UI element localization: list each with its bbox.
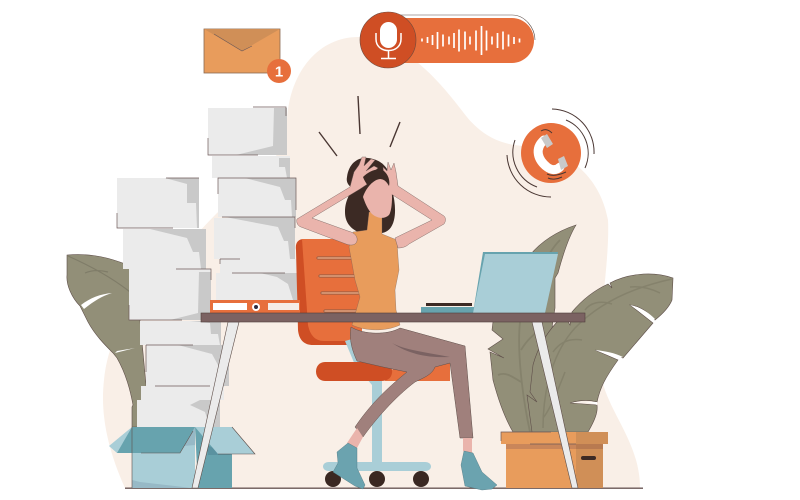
right desk leg <box>532 322 578 488</box>
right ankle <box>463 438 472 453</box>
right plant <box>488 225 673 432</box>
laptop base <box>421 307 476 313</box>
torso <box>349 212 400 330</box>
voice message <box>360 12 535 68</box>
woman <box>297 157 497 490</box>
laptop <box>421 252 558 313</box>
front hair strand <box>363 170 389 186</box>
trousers <box>350 327 473 438</box>
right paper stack <box>208 107 301 300</box>
office chair <box>296 239 450 487</box>
laptop keys <box>426 303 472 306</box>
paper stacks <box>117 107 301 428</box>
microphone button <box>360 12 416 68</box>
notification badge <box>267 59 291 83</box>
phone call icon <box>507 109 594 197</box>
left ankle <box>347 428 363 448</box>
left boot <box>333 443 365 489</box>
chair seat <box>385 361 450 381</box>
right arm <box>380 162 446 248</box>
face <box>363 179 392 218</box>
desk top <box>201 313 585 322</box>
left arm <box>297 157 378 245</box>
folder <box>210 300 300 313</box>
left plant <box>67 255 150 427</box>
back leaf <box>488 225 576 432</box>
floor line <box>125 488 643 489</box>
back leaf veins <box>498 240 560 432</box>
chair wheels <box>325 471 429 487</box>
voice pill <box>395 18 534 63</box>
envelope notification <box>204 29 291 83</box>
front leaf veins <box>543 279 672 428</box>
envelope notification: 1 <box>275 64 283 80</box>
sound waveform <box>422 26 520 55</box>
back hair <box>345 158 395 233</box>
stress burst lines <box>319 96 400 156</box>
leaf notch highlights <box>570 305 655 405</box>
chair back <box>296 239 362 345</box>
microphone icon <box>376 22 401 58</box>
left paper stack <box>117 178 229 428</box>
right boot <box>461 451 497 490</box>
background blob <box>103 37 640 488</box>
brown cardboard box <box>501 432 608 488</box>
left desk leg <box>192 322 239 488</box>
desk <box>192 313 585 488</box>
chair post and base <box>323 339 431 471</box>
blue cardboard box <box>109 427 255 488</box>
ringing arcs <box>507 109 594 197</box>
front leaf <box>527 274 673 432</box>
chair back slots <box>318 258 362 311</box>
handset <box>538 140 560 170</box>
laptop screen <box>473 252 558 313</box>
